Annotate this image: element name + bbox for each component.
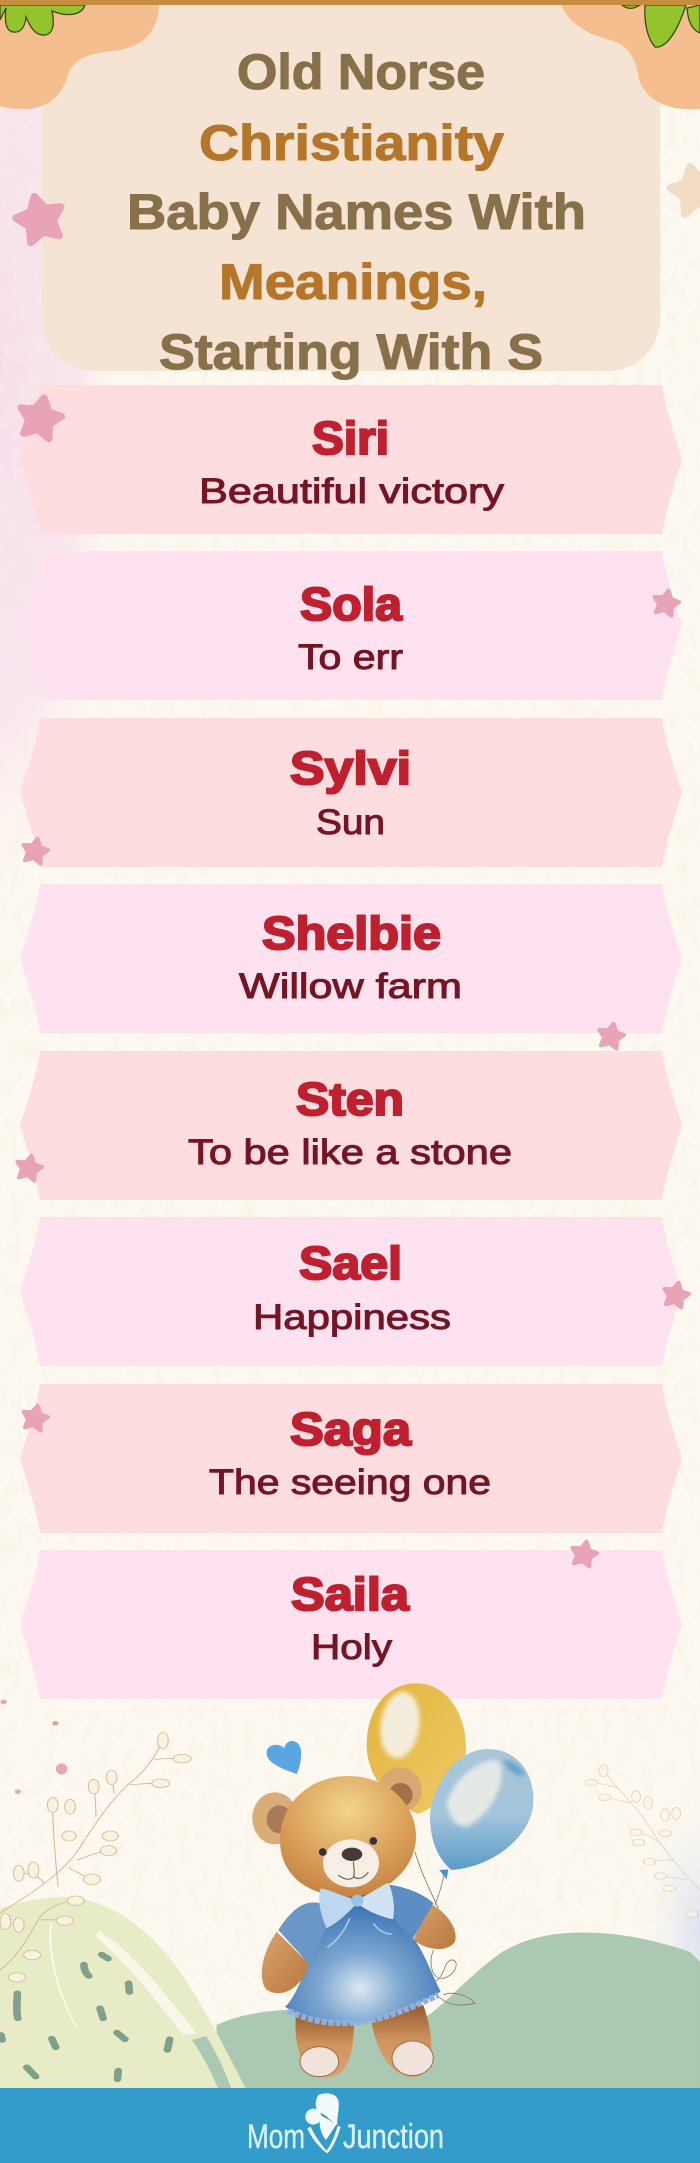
title: Baby Names With bbox=[127, 184, 586, 240]
card: Siri bbox=[20, 385, 682, 534]
card: Saila bbox=[20, 1550, 682, 1699]
card: Sylvi: Sun bbox=[316, 803, 385, 842]
card: Saga bbox=[20, 1384, 682, 1533]
top bar bbox=[0, 0, 700, 5]
illustration: teddy bear with balloons bbox=[252, 1683, 533, 2077]
card: Siri: Beautiful victory bbox=[199, 472, 505, 511]
card: Saga: Saga bbox=[290, 1403, 411, 1455]
dots bbox=[0, 1700, 67, 1794]
logo: MomJunction: Junction bbox=[343, 2118, 444, 2156]
title: Christianity bbox=[199, 115, 504, 171]
card: Sael: Sael bbox=[299, 1237, 402, 1289]
card: Saga: The seeing one bbox=[209, 1463, 491, 1502]
bottom scenery bbox=[0, 1700, 700, 2090]
icon: bow tie bbox=[319, 1883, 394, 1947]
card: Sylvi bbox=[20, 718, 682, 867]
card: Sola: Sola bbox=[300, 578, 402, 630]
logo: MomJunction bbox=[247, 2093, 444, 2156]
hill: green bbox=[217, 1933, 700, 2090]
footer bar bbox=[0, 2088, 700, 2163]
decorative stars bbox=[12, 162, 700, 1568]
corner decoration: right bbox=[561, 5, 700, 109]
card: Shelbie: Shelbie bbox=[262, 907, 441, 959]
card: Sten bbox=[20, 1051, 682, 1200]
icon: balloon strings bbox=[415, 1852, 475, 2005]
icon: blue heart bbox=[267, 1741, 301, 1774]
card: Sten: To be like a stone bbox=[188, 1133, 512, 1172]
card: Siri: Siri bbox=[312, 412, 389, 464]
card: Sola: To err bbox=[298, 638, 403, 677]
card: Sola bbox=[20, 551, 682, 700]
icon: mother and child silhouette bbox=[305, 2093, 341, 2153]
title bbox=[127, 44, 586, 380]
branch: left bbox=[0, 1733, 191, 1982]
branch: right bbox=[585, 1765, 700, 1917]
corner decoration: left bbox=[0, 5, 159, 109]
icon: bear right arm bbox=[413, 1903, 456, 1949]
title: Starting With S bbox=[159, 324, 543, 380]
icon: bear legs bbox=[296, 2005, 433, 2077]
title: Old Norse bbox=[237, 44, 485, 100]
title panel bbox=[42, 5, 660, 371]
card: Sylvi: Sylvi bbox=[290, 742, 411, 794]
icon: bear left arm bbox=[262, 1932, 308, 1993]
card: Saila: Holy bbox=[311, 1628, 393, 1667]
card: Sten: Sten bbox=[296, 1073, 404, 1125]
hill: pale yellow-green bbox=[0, 1897, 246, 2090]
card: Shelbie: Willow farm bbox=[239, 967, 462, 1006]
title: Meanings, bbox=[219, 254, 487, 310]
card: Saila: Saila bbox=[291, 1568, 409, 1620]
icon: bear head bbox=[252, 1767, 422, 1897]
card: Shelbie bbox=[20, 884, 682, 1033]
card: Sael bbox=[20, 1217, 682, 1366]
logo: MomJunction: Mom bbox=[247, 2118, 305, 2156]
card: Sael: Happiness bbox=[253, 1298, 451, 1337]
icon: blue balloon bbox=[430, 1749, 533, 1879]
icon: yellow balloon bbox=[367, 1683, 466, 1814]
icon: blue dress bbox=[278, 1885, 441, 2023]
